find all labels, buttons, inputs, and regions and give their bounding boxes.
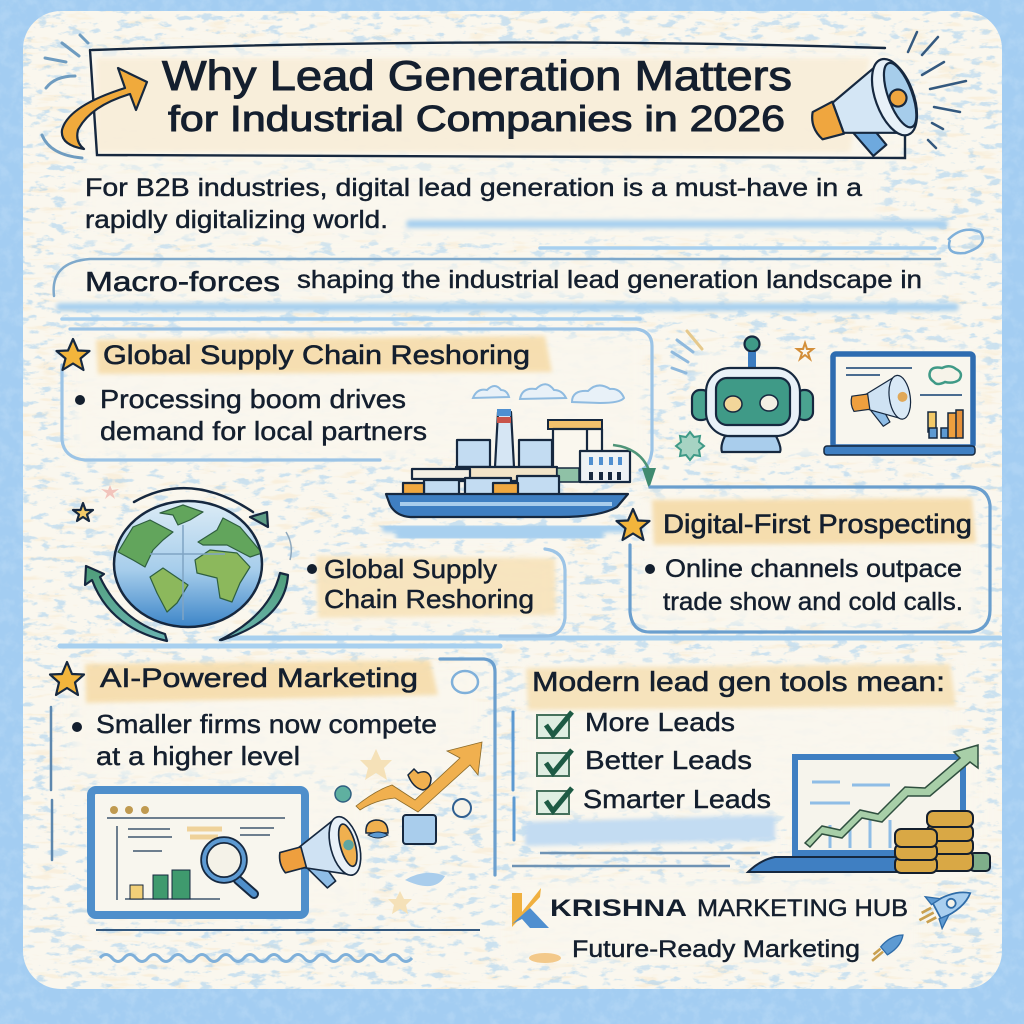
macro-forces label: Macro-forces: [85, 266, 280, 297]
clouds: [473, 384, 624, 403]
title banner: [90, 42, 905, 158]
panel heading: Digital-First Prospecting: [663, 509, 972, 539]
checklist item: better leads: [537, 745, 752, 776]
icon: star: [56, 339, 90, 370]
bullet text line 1: Smaller firms now compete: [96, 709, 437, 739]
title line 1: Why Lead Generation Matters: [162, 52, 792, 99]
intro line 2: rapidly digitalizing world.: [85, 206, 388, 234]
decorative wavy line: [100, 954, 412, 962]
bullet text line 2: at a higher level: [96, 741, 300, 771]
icon: orange swoosh arrow: [62, 68, 147, 149]
logo mark: [512, 888, 549, 928]
icon: robot: [672, 331, 813, 460]
bullet: [72, 722, 82, 732]
bullet text line 1: Processing boom drives: [100, 384, 406, 414]
panel heading: Global Supply Chain Reshoring: [103, 340, 530, 370]
bullet text line 1: Global Supply: [324, 554, 497, 584]
checklist item: better leads: Better Leads: [585, 745, 752, 775]
panel: digital-first prospecting: [616, 487, 990, 632]
icon: stacked gold coins: [895, 811, 990, 873]
checklist item: smarter leads: Smarter Leads: [583, 784, 771, 814]
bullet: [645, 564, 655, 574]
brand lockup: [512, 877, 979, 965]
icon: title sparks: [908, 32, 966, 148]
brand name bold: KRISHNA: [550, 895, 687, 922]
clear zones behind the main text: [60, 50, 980, 960]
title line 2: for Industrial Companies in 2026: [168, 98, 785, 139]
bullet text line 2: demand for local partners: [100, 416, 427, 446]
paint dab: [529, 953, 561, 963]
icon: magnifier: [204, 840, 254, 894]
macro-forces sentence: shaping the industrial lead generation landscape in: [297, 266, 922, 294]
tagline: Future-Ready Marketing: [572, 936, 860, 963]
icon: small marketing symbols: [335, 749, 471, 914]
panel: ai-powered marketing: [50, 659, 495, 930]
icon: small rocket: [868, 930, 907, 965]
icon: megaphone: [273, 813, 368, 898]
panel heading: Modern lead gen tools mean:: [532, 666, 945, 697]
panel heading: AI-Powered Marketing: [100, 663, 418, 693]
icon: large rocket: [911, 877, 979, 936]
panel: modern lead gen tools: [512, 664, 990, 873]
bullet text line 2: Chain Reshoring: [324, 584, 534, 614]
checklist item: more leads: More Leads: [585, 707, 735, 737]
icon: swirl decoration: [948, 230, 983, 253]
macro-forces strip: [54, 259, 940, 297]
icon: globe with arrows: [73, 485, 291, 641]
icon: laptop with megaphone: [824, 354, 975, 455]
intro text: [85, 174, 862, 234]
bullet: [307, 564, 317, 574]
intro line 1: For B2B industries, digital lead generation is a must-have in a: [85, 174, 862, 202]
panel: global supply chain reshoring: [56, 329, 652, 470]
bullet text line 2: trade show and cold calls.: [663, 588, 963, 616]
panel: global supply chain bullet: [307, 549, 565, 636]
icon: left sparks: [42, 35, 88, 158]
icon: browser monitor: [91, 790, 305, 915]
bullet: [75, 395, 85, 405]
icon: laptop with growth chart: [748, 745, 990, 873]
icon: title megaphone: [800, 53, 929, 172]
icon: rising orange arrow: [356, 742, 482, 812]
checklist item: more leads: [537, 707, 735, 738]
icon: star: [616, 509, 650, 540]
green arrow: [613, 445, 649, 470]
brand name regular: MARKETING HUB: [697, 895, 908, 922]
icon: cargo ship and factory: [386, 384, 656, 517]
icon: ring: [452, 671, 478, 693]
icon: star: [50, 662, 84, 695]
bullet text line 1: Online channels outpace: [665, 555, 962, 583]
